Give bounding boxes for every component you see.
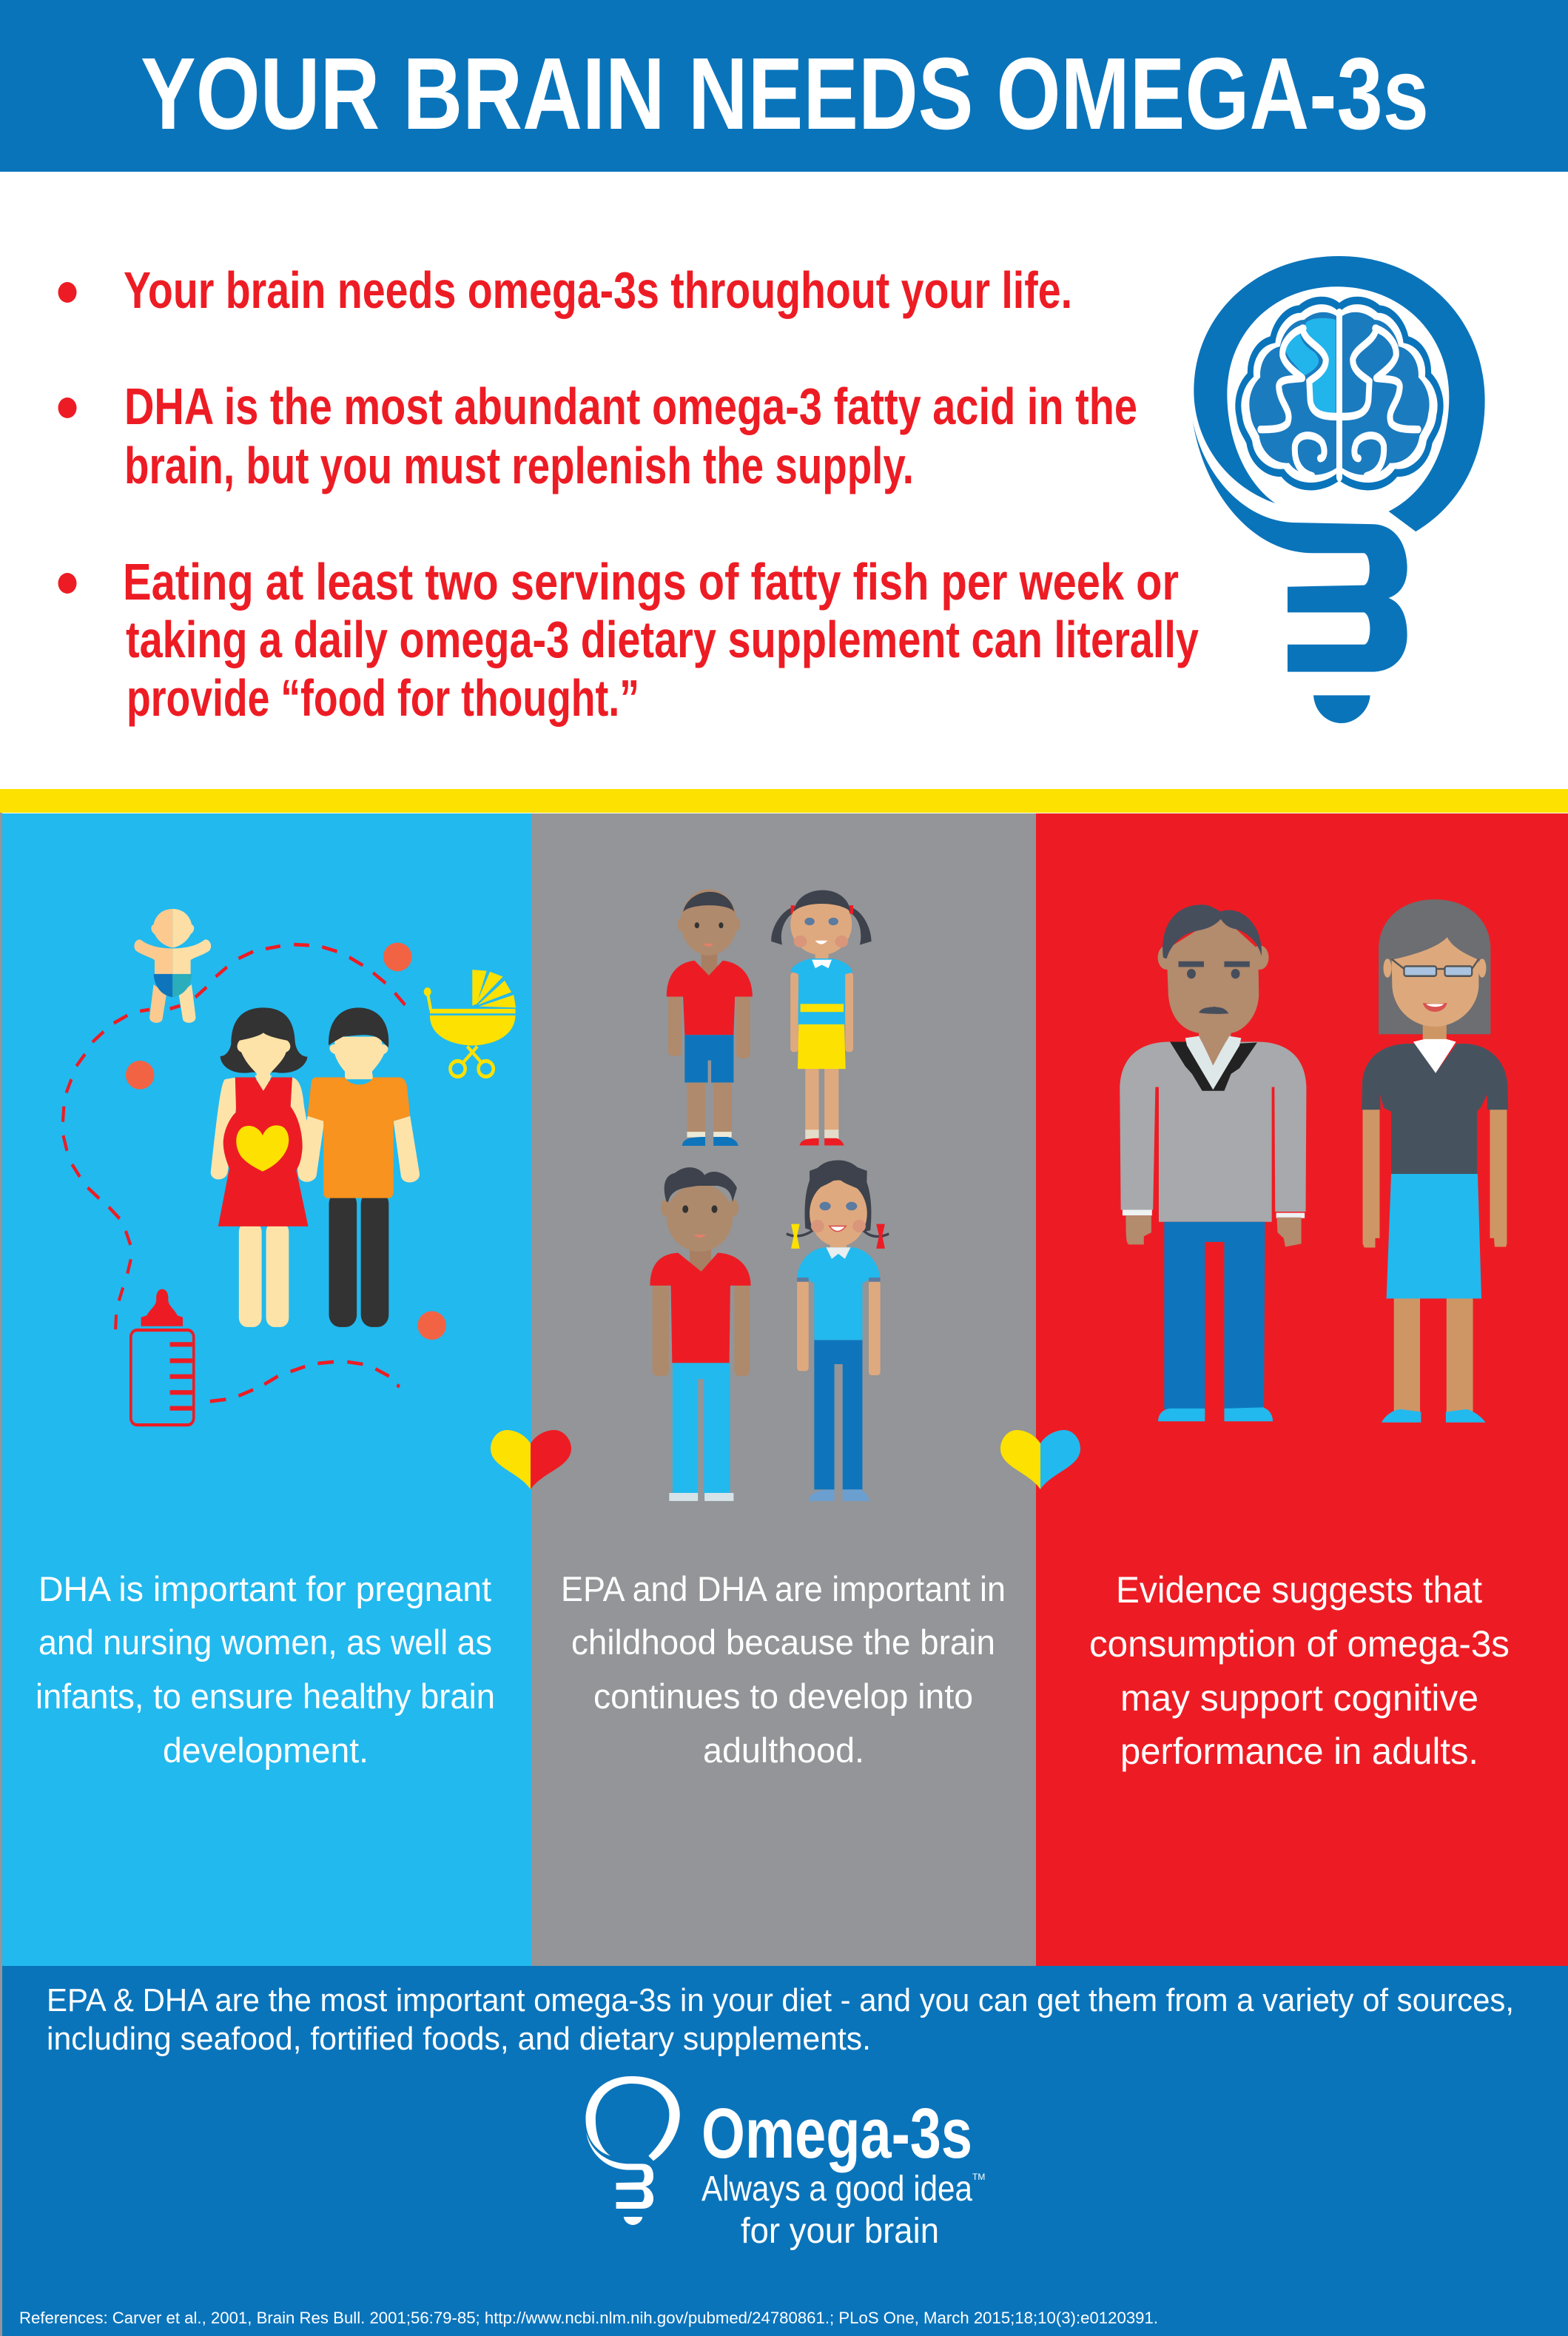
panel text: pregnant and nursing: infants, to ensure healthy brain xyxy=(36,1677,495,1716)
logo: Omega-3s bulb: TM xyxy=(972,2172,985,2182)
orange dots xyxy=(126,942,446,1340)
panel: childhood xyxy=(531,813,1036,1966)
panel text: adults xyxy=(1089,1569,1510,1772)
figure: man xyxy=(299,1007,420,1327)
illustration: two adults xyxy=(1120,899,1508,1423)
bullet two: brain, but you must replenish the supply. xyxy=(124,437,914,494)
illustration: family path xyxy=(63,909,516,1425)
panel: adults xyxy=(1036,813,1568,1966)
panel text: childhood: continues to develop into xyxy=(593,1677,973,1716)
footer band xyxy=(2,1966,1568,2336)
icon: yellow and red heart xyxy=(491,1430,571,1489)
figure: pregnant woman xyxy=(211,1007,316,1327)
left edge sliver xyxy=(0,813,2,2336)
panel text: childhood: EPA and DHA are important in xyxy=(561,1569,1006,1608)
figure: older woman xyxy=(1362,899,1508,1423)
header band with title xyxy=(0,0,1568,172)
panel text: childhood: adulthood. xyxy=(703,1731,864,1770)
panel text: pregnant and nursing xyxy=(36,1569,495,1770)
bullet three: provide “food for thought.” xyxy=(127,669,639,727)
panel text: adults: consumption of omega-3s xyxy=(1089,1623,1510,1665)
panel text: pregnant and nursing: and nursing women, as well as xyxy=(38,1622,492,1662)
icon: baby bottle xyxy=(131,1289,194,1425)
logo: Omega-3s bulb: for your brain xyxy=(741,2212,939,2251)
bullet three: Eating at least two servings of fatty fish per week or xyxy=(123,553,1179,611)
summary text xyxy=(47,1982,1514,2057)
panel text: childhood: childhood because the brain xyxy=(571,1622,995,1662)
panel text: adults: may support cognitive xyxy=(1120,1677,1478,1719)
illustration: four children xyxy=(650,889,889,1501)
panel text: pregnant and nursing: DHA is important for pregnant xyxy=(38,1569,491,1608)
panel: pregnancy and infancy xyxy=(2,813,531,1966)
icon: brain light bulb logo xyxy=(1193,256,1485,723)
icon: yellow and blue heart xyxy=(1000,1430,1080,1489)
figure: older boy xyxy=(650,1167,751,1501)
icon: stroller xyxy=(424,970,516,1076)
bullet two: DHA is the most abundant omega-3 fatty acid in the xyxy=(124,377,1137,435)
bullet three: taking a daily omega-3 dietary supplement can literally xyxy=(126,611,1199,668)
logo: Omega-3s bulb xyxy=(586,2076,985,2251)
figure: small boy xyxy=(667,889,753,1146)
icon: baby xyxy=(134,909,211,1023)
figure: older man xyxy=(1120,904,1306,1421)
panel text: adults: performance in adults. xyxy=(1120,1731,1478,1772)
logo: Omega-3s bulb: Always a good idea xyxy=(701,2169,972,2209)
figure: older girl xyxy=(787,1161,889,1501)
dashed path xyxy=(63,944,405,1401)
logo: Omega-3s bulb: Omega-3s xyxy=(701,2094,972,2173)
bullet three xyxy=(58,553,1199,727)
bullet one: Your brain needs omega-3s throughout your life. xyxy=(124,261,1072,319)
key message bullet list xyxy=(58,261,1199,727)
yellow divider band xyxy=(0,789,1568,813)
summary text: EPA & DHA are the most important omega-3s in your diet - and you can get them from a variety of sources, xyxy=(47,1982,1514,2018)
panel text: adults: Evidence suggests that xyxy=(1116,1569,1482,1611)
panel text: pregnant and nursing: development. xyxy=(163,1731,369,1770)
summary text: including seafood, fortified foods, and dietary supplements. xyxy=(47,2021,871,2057)
figure: small girl xyxy=(771,890,872,1145)
references: References: Carver et al., 2001, Brain Res Bull. 2001;56:79-85; http://www.ncbi.nlm.nih.gov/pubmed/24780861.; PLoS One, March 2015;18;10(3):e0120391. xyxy=(19,2309,1158,2327)
bullet two xyxy=(58,377,1137,494)
panel text: childhood xyxy=(561,1569,1006,1770)
